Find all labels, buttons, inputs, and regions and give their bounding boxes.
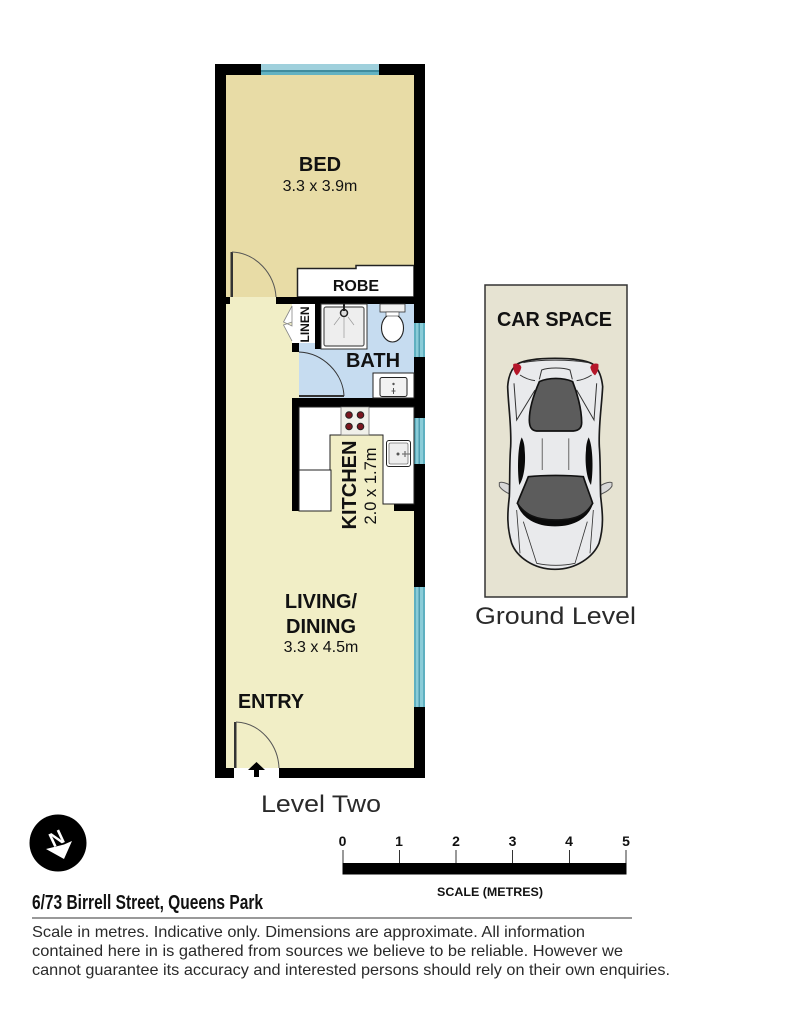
kitchen benches <box>299 407 414 504</box>
scale ticks <box>343 850 626 863</box>
disclaimer text: contained here in is gathered from sources we believe to be reliable. However we <box>32 943 623 960</box>
label: entry: ENTRY <box>238 691 305 713</box>
label: living dining: DINING <box>286 616 356 638</box>
label: kitchen size: 2.0 x 1.7m <box>362 447 380 525</box>
door: bedroom <box>230 252 276 297</box>
icon: north compass: N <box>46 826 68 852</box>
window: top <box>261 64 379 75</box>
door: bath <box>299 352 344 397</box>
level two caption: Level Two <box>261 791 381 818</box>
door: entry <box>234 722 279 768</box>
room: bed floor <box>226 75 414 298</box>
cooktop <box>341 407 369 435</box>
label: living dining: 3.3 x 4.5m <box>284 639 358 656</box>
scale numbers: 2 <box>452 833 460 849</box>
room: living dining floor <box>226 297 414 768</box>
divider rule <box>32 918 632 919</box>
robe cupboard <box>298 266 414 297</box>
floor plan: level two <box>215 64 425 778</box>
window: living <box>414 587 425 707</box>
bath vanity <box>373 373 414 398</box>
window: bath <box>414 323 425 357</box>
outer walls <box>215 64 425 778</box>
scale bar <box>339 833 630 899</box>
label: kitchen: KITCHEN <box>339 441 361 529</box>
interior walls <box>226 297 414 511</box>
linen cupboard <box>284 304 315 343</box>
scale bar rule <box>342 863 626 874</box>
toilet <box>380 304 405 342</box>
disclaimer text: cannot guarantee its accuracy and interested persons should rely on their own enquiries. <box>32 962 670 979</box>
car bay <box>485 285 627 597</box>
label: bed: 3.3 x 3.9m <box>283 178 357 195</box>
scale title: SCALE (METRES) <box>437 885 543 899</box>
scale numbers: 1 <box>395 833 403 849</box>
scale numbers: 5 <box>622 833 630 849</box>
address heading: 6/73 Birrell Street, Queens Park <box>32 892 264 914</box>
panel: car space <box>475 285 636 630</box>
label: robe: ROBE <box>333 278 379 295</box>
disclaimer text <box>32 924 670 979</box>
shower <box>321 304 367 349</box>
car space heading: CAR SPACE <box>497 309 612 331</box>
icon: north compass <box>30 814 86 872</box>
kitchen peninsula floor edge <box>329 435 331 470</box>
icon: entry arrow <box>248 762 265 777</box>
entry door opening <box>234 768 279 778</box>
scale numbers: 0 <box>339 833 347 849</box>
label: linen: LINEN <box>298 306 312 342</box>
scale numbers: 3 <box>509 833 517 849</box>
scale numbers <box>339 833 630 849</box>
label: living dining: LIVING/ <box>285 591 358 613</box>
label: bed: BED <box>299 154 341 176</box>
ground level caption: Ground Level <box>475 603 636 630</box>
disclaimer text: Scale in metres. Indicative only. Dimensions are approximate. All information <box>32 924 585 941</box>
icon: car top view <box>499 358 612 569</box>
scale numbers: 4 <box>565 833 573 849</box>
label: bath: BATH <box>346 350 400 372</box>
kitchen fridge <box>299 470 331 511</box>
room: bath floor <box>299 304 414 398</box>
kitchen sink <box>386 440 410 466</box>
window: kitchen <box>414 418 425 464</box>
label: living dining <box>284 591 358 656</box>
label: bed <box>283 154 357 195</box>
